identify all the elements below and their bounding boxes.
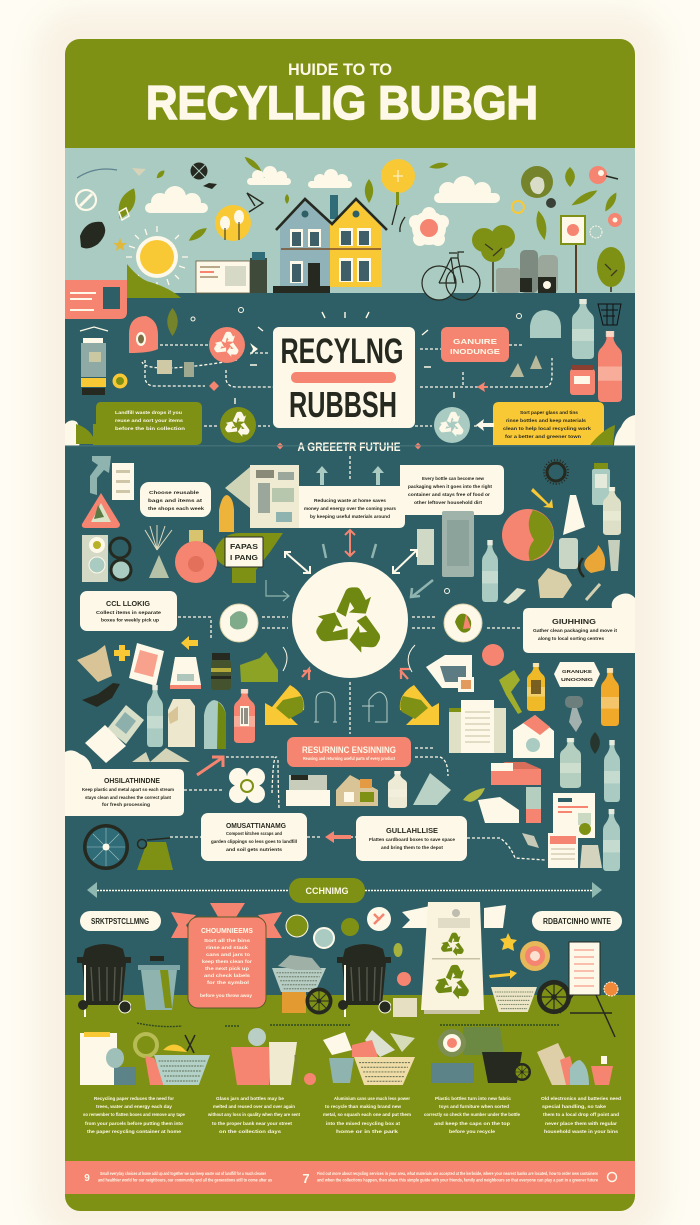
panel: sky scene background bbox=[65, 148, 635, 294]
coral divider bar bbox=[291, 372, 396, 383]
icon: milk bottle bbox=[603, 487, 621, 535]
clouds bbox=[145, 166, 500, 213]
text block: column 5: special handling, so take bbox=[542, 1104, 607, 1109]
icon: grey jar bbox=[81, 338, 106, 395]
text block: column 1: Recycling paper reduces the need for bbox=[94, 1096, 174, 1101]
icon: teal bin bbox=[138, 956, 180, 1010]
icon: paper box bbox=[286, 775, 330, 806]
text block: column 3: metal, so squash each one and put them bbox=[323, 1112, 411, 1117]
arrow: big yellow left bbox=[265, 685, 304, 725]
icon: cream jug bbox=[168, 699, 195, 747]
heading: recycling: RECYLNG bbox=[280, 332, 404, 371]
icon: crumple bbox=[538, 568, 572, 598]
icon: top right jar bbox=[592, 463, 610, 505]
icon: globe lower jar bbox=[559, 538, 578, 569]
illustration: trees bbox=[472, 225, 625, 292]
panel: coral sign board bbox=[188, 917, 266, 1008]
icon: framed doc bbox=[426, 655, 474, 692]
illustration: globe bbox=[502, 509, 554, 561]
icon: coral box bbox=[491, 762, 541, 785]
icon: fan and pale tree bbox=[145, 525, 172, 578]
icon: black bin middle bbox=[337, 944, 391, 1017]
callout: left note: for fresh processing bbox=[102, 802, 150, 807]
text block: column 1: so remember to flatten boxes and remove any tape bbox=[83, 1112, 185, 1117]
callout: gathering: GIUHHING bbox=[552, 619, 597, 626]
text block: column 3: into the mixed recycling box at bbox=[326, 1121, 401, 1126]
heading pill: right bbox=[532, 911, 622, 931]
icon: paper stack pale bbox=[107, 705, 144, 744]
icon: yellow plus bbox=[114, 645, 130, 661]
lower item group: bin and basket bbox=[80, 1032, 210, 1085]
icon: green recycle circle bbox=[220, 407, 256, 443]
text block: column 2: melted and reused over and over again bbox=[213, 1104, 295, 1109]
text block: column 5 bbox=[541, 1096, 621, 1134]
callout: wide note right text: container and stays free of food or bbox=[408, 492, 490, 497]
illustration: houses bbox=[273, 195, 387, 293]
callout: wide note left bbox=[299, 465, 504, 528]
icon: olive leaf bbox=[463, 788, 485, 802]
text block: column 3: Aluminium cans use much less power bbox=[334, 1096, 410, 1101]
illustration: right hill bbox=[590, 425, 615, 445]
lower item group: papers and pot bbox=[537, 1043, 613, 1085]
callout: green note bbox=[93, 402, 202, 445]
icon: olive bag bbox=[137, 838, 173, 870]
icon: yellow balloon bbox=[381, 159, 415, 205]
panel: coral footer strip: Small everyday choices at home add up and together we can keep waste out of landfill for a much cleaner bbox=[100, 1171, 266, 1176]
icon: bag bbox=[580, 845, 602, 868]
heading: subtitle: HUIDE TO TO bbox=[288, 60, 392, 79]
ribbon: coral sign: keep them clean for bbox=[202, 959, 252, 964]
callout: wide note left: money and energy over the coming years bbox=[304, 506, 396, 511]
dashes: ground bbox=[137, 1023, 560, 1027]
callout: collecting: CCL LLOKIG bbox=[106, 601, 151, 608]
icon: coral ball bbox=[482, 644, 504, 666]
icon: white cloth bbox=[563, 495, 585, 535]
text block: column 1 bbox=[83, 1096, 185, 1134]
icon: bottle bottom right bbox=[603, 809, 620, 871]
icon: tape rolls bbox=[82, 535, 131, 582]
icons: small round badges bbox=[286, 907, 417, 1017]
text block: column 5: them to a local drop off point and bbox=[543, 1112, 619, 1117]
callout: bubble left: bags and items at bbox=[148, 498, 203, 503]
ribbon: coral sign: cans and jars to bbox=[206, 952, 250, 957]
callout: grouping tag: UNOONIG bbox=[561, 677, 594, 682]
icon: coral recycle circle bbox=[209, 327, 245, 363]
ribbon: coral sign: rinse and stack bbox=[206, 945, 249, 950]
callout: yellow note bbox=[493, 402, 604, 445]
panel: coral footer strip bbox=[65, 1161, 635, 1194]
text block: column 4: Plastic bottles turn into new fabric bbox=[435, 1096, 511, 1101]
callout: left note: stays clean and reaches the correct plant bbox=[85, 795, 171, 800]
illustration: bicycle bbox=[422, 252, 480, 300]
icon: coral paper bbox=[129, 643, 164, 686]
icon: green crumple bbox=[240, 652, 278, 682]
callout: wide note right text: packaging when it goes into the right bbox=[408, 484, 492, 489]
icon: coral bottle bbox=[598, 331, 622, 402]
ribbon: coral sign: the next pick up bbox=[205, 966, 249, 971]
heading pill: left bbox=[80, 911, 161, 931]
panel: coral footer strip: and when the collections happen, then share this simple guide with your friends, family and neighbours so that everyone can play a part in a greener future bbox=[317, 1178, 598, 1182]
callout: coral button: Reusing and returning useful parts of every product bbox=[303, 756, 395, 761]
panel: green ground bbox=[65, 995, 635, 1212]
icon: clamp bbox=[503, 588, 526, 604]
icon: sun bbox=[126, 226, 188, 288]
text block: column 4: before you recycle bbox=[449, 1129, 495, 1134]
callout: coral button: RESURNINC ENSINNING bbox=[302, 745, 396, 755]
icon: tagline sparkles bbox=[278, 444, 420, 448]
icon: grey tool bbox=[565, 696, 583, 732]
callout: lower middle note: Compost kitchen scraps and bbox=[226, 831, 282, 836]
icon: top rays around card bbox=[235, 312, 454, 404]
illustration: sky scene bbox=[65, 155, 635, 1194]
callout: lower right note bbox=[356, 816, 467, 861]
panel: teal main background bbox=[65, 293, 635, 996]
callout: collecting bbox=[80, 591, 177, 631]
callout: collecting: Collect items in separate bbox=[96, 610, 162, 615]
arrow: big yellow right bbox=[400, 685, 439, 725]
callout: coral tag: GANUIRE bbox=[453, 339, 497, 346]
heading pill: centre bbox=[289, 878, 365, 903]
panel: document page bbox=[250, 465, 299, 528]
arrow: coral left bbox=[325, 831, 351, 843]
icon: pale bottle tall bbox=[560, 738, 581, 788]
illustration: hill left bbox=[76, 424, 96, 444]
icon: top small papers bbox=[417, 511, 474, 577]
arrow: yellow bbox=[489, 970, 517, 979]
callout: collecting: boxes for weekly pick up bbox=[101, 618, 159, 622]
callout: lower right note: GULLAHLLISE bbox=[386, 828, 438, 835]
dashed centre top bbox=[349, 456, 351, 480]
text block: column 3: to recycle than making brand new bbox=[325, 1104, 401, 1109]
callout: lower middle note bbox=[201, 813, 307, 861]
icon: roof arms and small marks bbox=[80, 308, 522, 331]
icon: coral warning triangle bbox=[82, 493, 120, 528]
icon: small flask right bbox=[444, 604, 482, 642]
icon: pale strip bbox=[608, 540, 620, 571]
icon: easel board bbox=[560, 942, 615, 1037]
icon: paper triangle bbox=[225, 467, 250, 508]
callout: coral tag: INODUNGE bbox=[450, 349, 500, 356]
callout: lower right note: and bring them to the depot bbox=[381, 845, 443, 850]
callout: grouping tag bbox=[554, 662, 600, 687]
text block: column 5: never place them with regular bbox=[545, 1121, 617, 1126]
icon: orange bottle bbox=[601, 668, 619, 726]
icon: dark jar bbox=[211, 653, 231, 690]
callout: gathering: along to local sorting centres bbox=[538, 636, 604, 641]
panel: coral notice box bbox=[65, 280, 127, 319]
callout: yellow note: clean to help local recycling work bbox=[503, 426, 592, 431]
icon: pen bbox=[586, 584, 600, 600]
ribbon: coral sign: Sort all the bins bbox=[204, 938, 251, 943]
callout: wide note left: by keeping useful materials around bbox=[310, 514, 390, 519]
icon: yellow capsule bbox=[219, 495, 234, 532]
icon: wire basket bbox=[598, 304, 621, 325]
callout: gathering: Gather clean packaging and move it bbox=[533, 628, 617, 633]
callout: lower middle note: and soil gets nutrients bbox=[226, 847, 282, 852]
text block: column 2: Glass jars and bottles may be bbox=[216, 1096, 284, 1101]
illustration: cloud above left note bbox=[65, 750, 92, 775]
icon: leaf on teal bbox=[167, 308, 178, 336]
ribbon: coral sign: CHOUMNIEEMS bbox=[201, 926, 253, 935]
arrows: around big circle bbox=[266, 530, 450, 680]
callout: coral tag bbox=[441, 327, 509, 362]
panel: big recycle circle bbox=[292, 562, 408, 678]
icon: mountain papers bbox=[132, 748, 190, 762]
text block: column 4: and keep the caps on the top bbox=[434, 1121, 510, 1126]
lower item group: gear and black bin bbox=[431, 1027, 531, 1083]
text block: column 5: household waste in your bins bbox=[544, 1129, 619, 1134]
callout: bubble left: Choose reusable bbox=[149, 490, 200, 495]
icon: pale bottle centre bbox=[482, 540, 498, 602]
icon: flame bbox=[579, 545, 605, 577]
connectors: lower bbox=[170, 748, 545, 860]
illustration: notice board bbox=[196, 252, 267, 293]
callout: yellow note: rinse bottles and keep materials bbox=[506, 418, 586, 423]
illustration: green hill bbox=[127, 264, 181, 298]
callout: lower middle note: garden clippings so less goes to landfill bbox=[211, 839, 297, 844]
icon: bottle pale right bbox=[604, 740, 620, 802]
centre items row bbox=[286, 771, 451, 808]
icon: dark leaf bbox=[590, 732, 600, 754]
icon: document bbox=[112, 463, 134, 500]
ribbon: coral sign bbox=[171, 903, 282, 1008]
icon: bicycle wheel bbox=[83, 824, 129, 870]
icon: envelope house bbox=[513, 715, 554, 758]
icon: grey crumple bbox=[522, 833, 539, 848]
icon: dome bbox=[530, 310, 561, 338]
callout: lower middle note: OMUSATTIANAMG bbox=[226, 823, 287, 830]
callout: green note: before the bin collection bbox=[115, 426, 185, 431]
tagline: A GREEETR FUTUHE bbox=[298, 440, 400, 454]
icon: coral bulb bbox=[175, 530, 217, 583]
icon: pale arrow bbox=[90, 456, 111, 495]
icon: papers bbox=[478, 797, 519, 823]
text block: column 5: Old electronics and batteries need bbox=[541, 1096, 621, 1101]
illustration: right cloud bbox=[614, 415, 635, 446]
callout: yellow note: Sort paper glass and tins bbox=[520, 410, 578, 415]
icon: small bottle bbox=[526, 787, 541, 823]
icon: tan box bbox=[336, 775, 378, 806]
ribbon: coral sign: for the symbol bbox=[207, 980, 249, 985]
text block: column 2: to the proper bank near your street bbox=[212, 1121, 292, 1126]
icon: concentric target bbox=[520, 941, 550, 971]
text block: column 1: the paper recycling container at home bbox=[87, 1129, 182, 1134]
callout: gathering bbox=[523, 594, 635, 653]
callout: bubble left bbox=[140, 482, 211, 517]
arrows: pale up bbox=[316, 466, 384, 485]
icon: coral jar bbox=[570, 365, 595, 395]
callout: wide note right text bbox=[408, 476, 492, 505]
icon: pale bottle bbox=[147, 685, 163, 747]
icon: bike wheel bbox=[537, 980, 571, 1014]
text block: column 2: on the collection days bbox=[219, 1129, 282, 1134]
illustration: left cloud bbox=[65, 420, 81, 446]
callout: green note: reuse and sort your items bbox=[115, 418, 184, 423]
icon: black shape bbox=[82, 683, 120, 707]
heading pill: centre: CCHNIMG bbox=[306, 886, 348, 896]
icon: cart basket bbox=[272, 955, 332, 1014]
ribbon: coral sign: before you throw away bbox=[200, 993, 252, 998]
callout: wide note left: Reducing waste at home saves bbox=[314, 498, 386, 503]
icon: coral arch bbox=[129, 316, 158, 353]
icon: green blob sign bbox=[215, 533, 283, 583]
right cluster of items bbox=[426, 538, 620, 871]
icon: cream basket bbox=[491, 987, 537, 1012]
callout: left note bbox=[65, 769, 184, 816]
lower item group: coral and cream bins bbox=[231, 1028, 316, 1085]
callout: grouping tag: GRANUKE bbox=[562, 669, 592, 674]
icon: pale recycle circle bbox=[434, 407, 470, 443]
icon: pale bottle top right bbox=[572, 299, 594, 359]
arrows: section two bbox=[209, 343, 494, 431]
callout: wide note right text: other leftover household dirt bbox=[414, 500, 483, 505]
sections: dashed connectors top bbox=[142, 345, 552, 426]
panel: central card RECYLNG RUBBSH bbox=[273, 327, 415, 428]
dashes around circle bbox=[178, 617, 522, 734]
panel: coral footer strip: 9 bbox=[84, 1173, 90, 1184]
panel: fridge with recycle marks bbox=[402, 902, 506, 1014]
icon: green blob sign: I PANG bbox=[230, 555, 259, 562]
icon: infographic sheet bbox=[553, 793, 595, 838]
callout: coral button bbox=[287, 737, 411, 767]
callout: lower right note: Flatten cardboard boxes to save space bbox=[369, 837, 455, 842]
icon: cream binder bbox=[449, 700, 506, 753]
text block: column 2 bbox=[207, 1096, 300, 1134]
text block: column 4: correctly so check the number under the bottle bbox=[424, 1112, 520, 1117]
icon: orange gear bbox=[604, 982, 618, 996]
icon: newspaper bbox=[548, 833, 578, 868]
heading: main title: RECYLLIG BUBGH bbox=[146, 76, 538, 129]
icon: yellow arrow bbox=[181, 636, 198, 650]
icon: black bin left bbox=[77, 944, 131, 1017]
text block: column 2: without any loss in quality when they are sent bbox=[207, 1112, 300, 1117]
callout: green note: Landfill waste drops if you bbox=[115, 410, 182, 415]
panel: coral footer strip: and healthier world for our neighbours, our community and all the generations still to come after us bbox=[98, 1178, 272, 1182]
icon: big recycling symbol bbox=[309, 587, 387, 658]
section: dashed divider with arrows bbox=[87, 882, 602, 898]
heading: rubbish: RUBBSH bbox=[289, 384, 397, 425]
icon: signpost bbox=[561, 216, 585, 293]
icon: yellow bottle bbox=[527, 663, 545, 711]
icon: tan crumple bbox=[77, 645, 112, 682]
panel: coral footer strip: Find out more about recycling services in your area, what materials are accepted at the kerbside, where your nearest banks are located, how to order new containers bbox=[317, 1171, 598, 1176]
icon: coral bottle barcode bbox=[234, 689, 255, 743]
icon: yellow circle with trees bbox=[215, 205, 251, 241]
lower item group: mess and basket bbox=[323, 1030, 415, 1085]
icon: small circle and paper bbox=[112, 360, 194, 388]
icon: green blob sign: FAPAS bbox=[230, 544, 258, 551]
panel: coral footer strip: 7 bbox=[302, 1171, 310, 1186]
icons: leaves bbox=[113, 155, 619, 244]
icons: sky decorations bbox=[76, 162, 622, 251]
icon: small flask left bbox=[220, 604, 258, 642]
illustration: machines bbox=[496, 250, 558, 293]
text block: column 4 bbox=[424, 1096, 520, 1134]
icon: white bottle bbox=[388, 771, 407, 808]
callout: left note: Keep plastic and metal apart so each stream bbox=[82, 787, 174, 792]
icon: pale cylinder bbox=[204, 700, 226, 749]
panel: title banner bbox=[65, 39, 635, 149]
icon: flower clover bbox=[229, 768, 265, 803]
callout: yellow note: for a better and greener town bbox=[505, 434, 581, 439]
icon: cream box bbox=[170, 657, 201, 689]
ribbon: coral sign: and check labels bbox=[204, 973, 251, 978]
icon: flower bbox=[409, 207, 449, 246]
heading pill: right: RDBATCINHO WNTE bbox=[543, 917, 612, 926]
icon: olive spray bbox=[499, 670, 522, 714]
heading pill: left: SRKTPSTCLLMNG bbox=[91, 917, 149, 926]
left cluster of items bbox=[77, 636, 278, 763]
text block: column 1: trees, water and energy each day bbox=[96, 1104, 172, 1109]
icon: crumples bbox=[510, 355, 542, 377]
callout: left note: OHSILATHINDNE bbox=[104, 778, 160, 785]
callout: wide note right text: Every bottle can become new bbox=[422, 476, 484, 481]
arrow: coral to flower bbox=[197, 757, 223, 775]
icon: pale sail bbox=[413, 773, 451, 805]
icon: paper stack cream bbox=[85, 725, 126, 763]
callout: bubble left: the shops each week bbox=[148, 506, 205, 511]
text block: column 3: home or in the park bbox=[336, 1129, 399, 1134]
text block: column 4: toys and furniture when sorted bbox=[439, 1104, 509, 1109]
text block: column 1: from your parcels before putting them into bbox=[85, 1121, 183, 1126]
text block: column 3 bbox=[323, 1096, 411, 1134]
arrow: yellow pointer bbox=[531, 488, 553, 508]
divider band bbox=[65, 445, 635, 446]
icon: black sun ring bbox=[544, 460, 568, 484]
icon: yellow star bbox=[500, 933, 517, 951]
icons: thin outlines bbox=[314, 692, 387, 722]
